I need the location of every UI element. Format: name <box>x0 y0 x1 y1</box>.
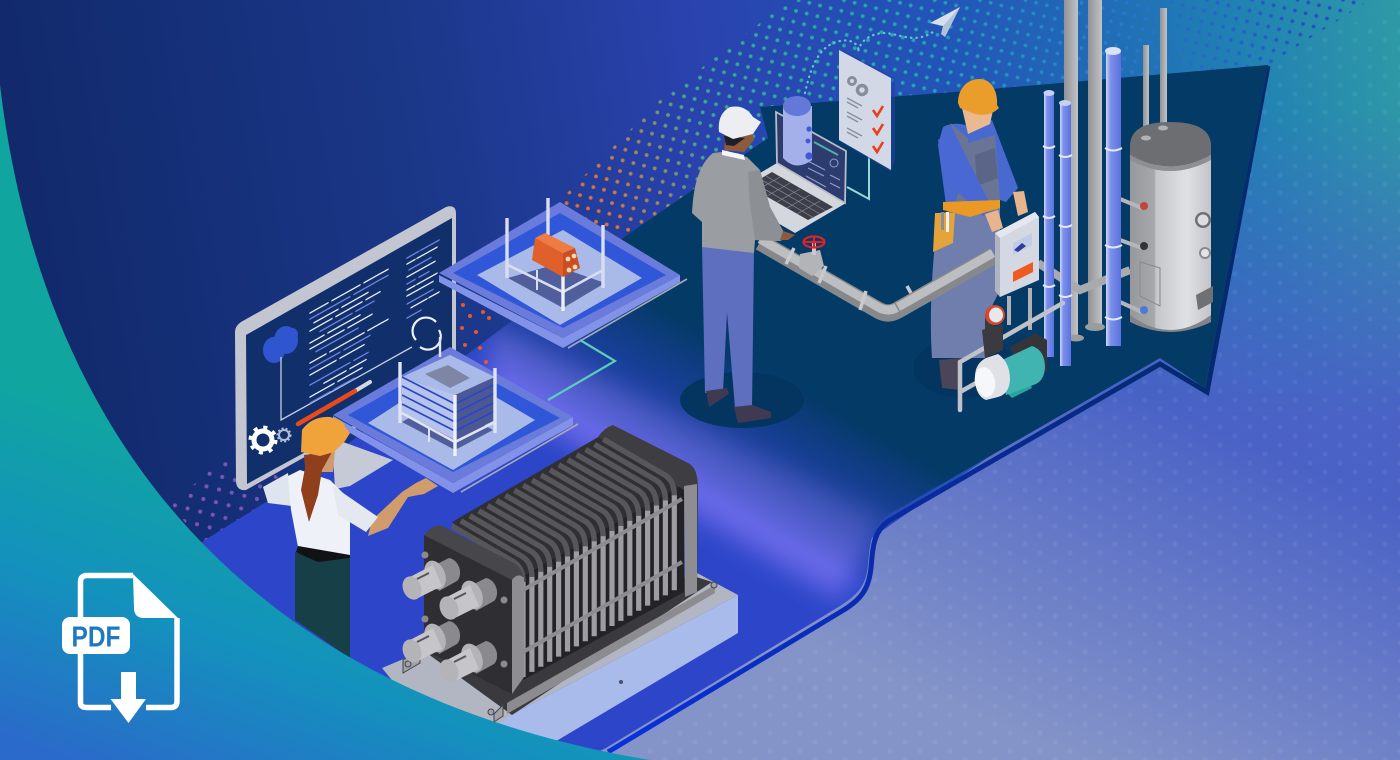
pump white casing <box>975 354 1010 400</box>
arm right <box>368 478 438 536</box>
front end plate <box>424 525 524 694</box>
gear icon small <box>278 428 290 442</box>
stacked plates <box>402 355 495 440</box>
trousers <box>702 246 754 410</box>
pipe segment over worker leg <box>898 253 993 310</box>
hard hat <box>958 79 999 115</box>
small gauge <box>1199 247 1211 259</box>
arm left sleeve <box>263 473 292 506</box>
belt <box>296 546 350 564</box>
man in grey sweater and white cap <box>692 106 795 423</box>
monitor stand <box>332 438 393 489</box>
rack frame lower <box>400 337 495 456</box>
box window <box>1013 233 1032 255</box>
neck <box>308 450 335 472</box>
face <box>962 106 994 134</box>
shoes <box>939 358 962 390</box>
white collar <box>722 150 745 160</box>
download arrow <box>110 672 146 723</box>
orange dots between monitor and platforms <box>460 303 491 364</box>
tie rods <box>523 499 682 652</box>
access panel <box>1140 262 1160 306</box>
black pump head <box>1010 333 1047 372</box>
pipe collars <box>786 248 917 310</box>
control box <box>1196 286 1213 310</box>
gear icon large <box>250 428 276 452</box>
pipe shadow ellipses on floor <box>680 338 1017 428</box>
check boxes <box>873 106 883 152</box>
refresh icon <box>413 318 441 350</box>
dotted flight path <box>805 32 933 93</box>
woman engineer <box>263 417 438 660</box>
rack frame <box>507 198 603 311</box>
mounting bolts <box>403 582 717 722</box>
white frame piping <box>960 303 1063 410</box>
background: lower-right lavender wash <box>580 30 1400 760</box>
platform: lower with stacked plates <box>333 337 578 493</box>
connector line teal <box>548 340 615 400</box>
main pipe with valve <box>760 236 993 313</box>
water heater tank <box>1120 122 1213 332</box>
background: right-side blue wash <box>580 30 1400 760</box>
teal motor <box>998 346 1045 395</box>
nozzles <box>1120 199 1142 312</box>
back end plate <box>598 425 698 597</box>
floor base blue <box>100 65 1268 760</box>
key grid <box>754 176 826 218</box>
monitor frame <box>235 206 456 490</box>
pump assembly <box>960 303 1063 410</box>
keyboard <box>748 172 833 220</box>
light beam across floor <box>490 320 885 600</box>
valve wheel <box>804 236 824 248</box>
dial gauge <box>1195 212 1211 228</box>
monitor screen <box>246 218 452 484</box>
laptop base <box>726 163 846 233</box>
cooling fins <box>452 439 674 677</box>
teal curved corner <box>0 85 650 760</box>
sweater <box>692 152 787 253</box>
tank cap <box>1130 122 1211 166</box>
progress bar <box>298 382 370 424</box>
folded corner <box>133 574 178 618</box>
shirt <box>288 470 350 557</box>
tank hologram <box>783 96 813 166</box>
screen readouts <box>806 142 840 188</box>
torso shirt <box>938 120 1018 205</box>
plate bolts <box>422 552 508 668</box>
valve stem <box>812 241 816 255</box>
tool belt <box>943 200 1000 217</box>
red battery module <box>532 233 580 277</box>
checklist connector <box>847 156 869 199</box>
pdf text: PDF <box>72 622 120 654</box>
text lines <box>847 98 862 138</box>
laptop screen <box>776 112 846 203</box>
paper plane <box>930 7 960 37</box>
dotted texture: lower right <box>620 0 1400 760</box>
worker in overalls <box>931 79 1028 390</box>
pdf label <box>62 617 130 654</box>
arm reaching <box>938 130 993 216</box>
connecting pipes to tank <box>1038 263 1130 290</box>
hard hat <box>301 417 350 456</box>
hands <box>985 210 1003 232</box>
rack shadow <box>508 265 605 308</box>
blue pipes <box>1043 47 1122 366</box>
dotted patch: purple near monitor <box>170 445 290 545</box>
floor dark navy area <box>100 65 1268 760</box>
checklist document <box>839 50 895 172</box>
trousers <box>295 552 350 660</box>
strap rail <box>507 585 715 714</box>
floor: isometric platform <box>100 65 1268 760</box>
top fittings <box>1141 136 1151 140</box>
battery stack <box>399 425 698 694</box>
sleeve right <box>333 486 378 532</box>
dotted band behind the floor <box>564 0 1365 236</box>
hand <box>780 231 795 240</box>
sleeve shade <box>748 170 787 241</box>
hair and ponytail <box>301 452 332 522</box>
box support legs <box>1009 288 1030 330</box>
chart axis <box>281 347 412 420</box>
screen text lines <box>310 269 388 403</box>
overalls bib <box>950 123 1000 208</box>
cloud icon <box>263 326 298 363</box>
floor lip edge <box>608 66 1268 752</box>
file outline <box>80 576 177 708</box>
screen side column lines <box>407 240 439 318</box>
white cap <box>719 106 761 139</box>
platform: upper with red battery module <box>439 198 687 348</box>
gray standing pipes behind <box>1064 0 1167 342</box>
gears <box>848 78 866 94</box>
battery base plinth <box>382 573 738 760</box>
side shade <box>520 484 684 680</box>
laptop with tank hologram <box>726 96 846 233</box>
foot <box>1002 378 1032 398</box>
head <box>724 130 754 152</box>
shoes <box>706 388 729 407</box>
control box on wall <box>995 212 1039 330</box>
pdf download icon <box>62 574 178 723</box>
pressure gauge <box>985 305 1005 332</box>
pressure base <box>982 324 1003 358</box>
tool pouch <box>933 212 955 252</box>
monitor <box>235 206 456 490</box>
valve body <box>799 250 824 276</box>
lower rack shadow <box>402 400 493 450</box>
orange label <box>1013 262 1033 282</box>
stack dark backing <box>452 436 684 680</box>
bib pocket <box>975 148 998 186</box>
ports <box>399 557 497 685</box>
legs <box>931 205 1000 358</box>
